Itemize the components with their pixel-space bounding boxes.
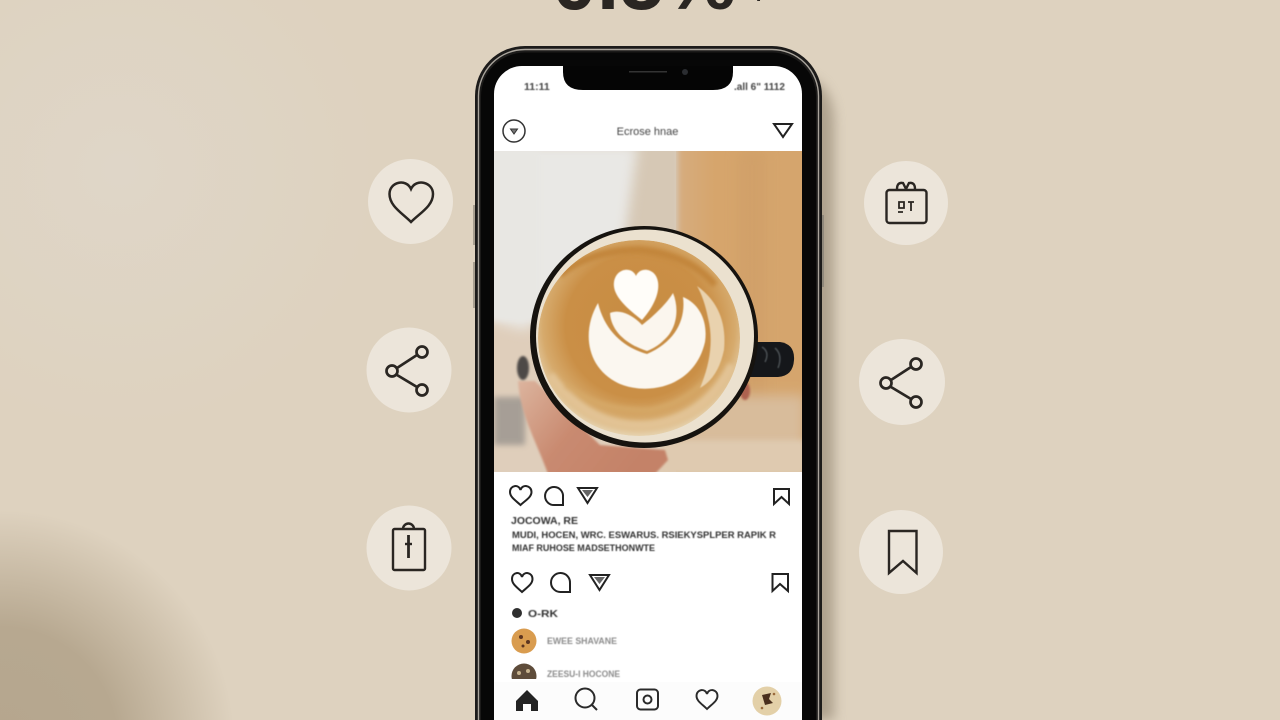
- icon: save: [774, 489, 789, 504]
- post caption: [511, 516, 777, 553]
- likes count: [512, 608, 558, 618]
- icon: like: [512, 573, 532, 592]
- avatar: cookie: [512, 628, 536, 654]
- avatar: pastry: [512, 664, 536, 688]
- badge: shopping tag: [366, 506, 452, 590]
- finger on the right of the cup: [740, 382, 750, 400]
- bottom navigation: [494, 682, 802, 720]
- foam heart: [614, 270, 658, 320]
- icon: send inner shade: [582, 490, 593, 497]
- app header: [503, 120, 792, 142]
- badge: share: [859, 339, 945, 425]
- icon: send: [774, 124, 792, 137]
- status bar right icons: .all 6" 1112: [734, 82, 785, 93]
- icon: save: [772, 574, 788, 591]
- phone: [473, 46, 824, 720]
- app title: Ecrose hnae: [617, 126, 678, 138]
- status bar left time: 11:11: [524, 81, 550, 93]
- left feature icons: [366, 159, 453, 590]
- comment one: [512, 628, 617, 654]
- second action row: [512, 573, 788, 592]
- icon: home: [516, 690, 538, 711]
- camera: [682, 69, 688, 75]
- caption text: MUDI, HOCEN, WRC. ESWARUS. RSIEKYSPLPER RAPIK R: [512, 530, 777, 540]
- icon: send: [578, 488, 597, 503]
- infographic canvas: [0, 0, 948, 720]
- comment text: EWEE SHAVANE: [547, 636, 617, 647]
- hand: [518, 381, 668, 474]
- badge: gift: [864, 161, 948, 245]
- cup handle: [748, 342, 794, 377]
- photo backdrop: [490, 145, 806, 480]
- phone shadow: [490, 75, 834, 720]
- phone body: [473, 46, 824, 720]
- foam leaf: [610, 293, 676, 351]
- likes count: O-RK: [528, 609, 559, 620]
- post photo: latte: [490, 145, 806, 480]
- badge: share: [366, 328, 452, 412]
- caption second line: MIAF RUHOSE MADSETHONWTE: [512, 543, 655, 553]
- foam swirl: [697, 286, 724, 388]
- latte art: [589, 270, 724, 389]
- comment two: [512, 664, 620, 688]
- badge: bookmark: [859, 510, 943, 594]
- foam crescent: [589, 297, 706, 389]
- right feature icons: [859, 161, 948, 594]
- icon: send: [590, 575, 609, 590]
- icon: reels: [637, 690, 658, 710]
- cup rim: [530, 226, 758, 448]
- icon: comment: [545, 487, 563, 505]
- notch: [563, 66, 733, 90]
- icon: profile logo: [503, 120, 525, 142]
- badge: heart: [368, 159, 453, 244]
- fingertip behind the cup: [517, 356, 529, 380]
- first action row: [510, 486, 789, 505]
- icon: like: [510, 486, 532, 505]
- speaker: [629, 71, 667, 72]
- avatar: profile: [752, 686, 782, 716]
- icon: activity: [696, 690, 718, 709]
- icon: search: [576, 688, 597, 710]
- icon: send inner shade: [594, 577, 605, 584]
- coffee surface: [538, 240, 740, 436]
- comment text: ZEESU-I HOCONE: [547, 669, 620, 680]
- caption author: JOCOWA, RE: [511, 516, 578, 527]
- icon: comment: [551, 573, 570, 592]
- screen: [490, 66, 806, 720]
